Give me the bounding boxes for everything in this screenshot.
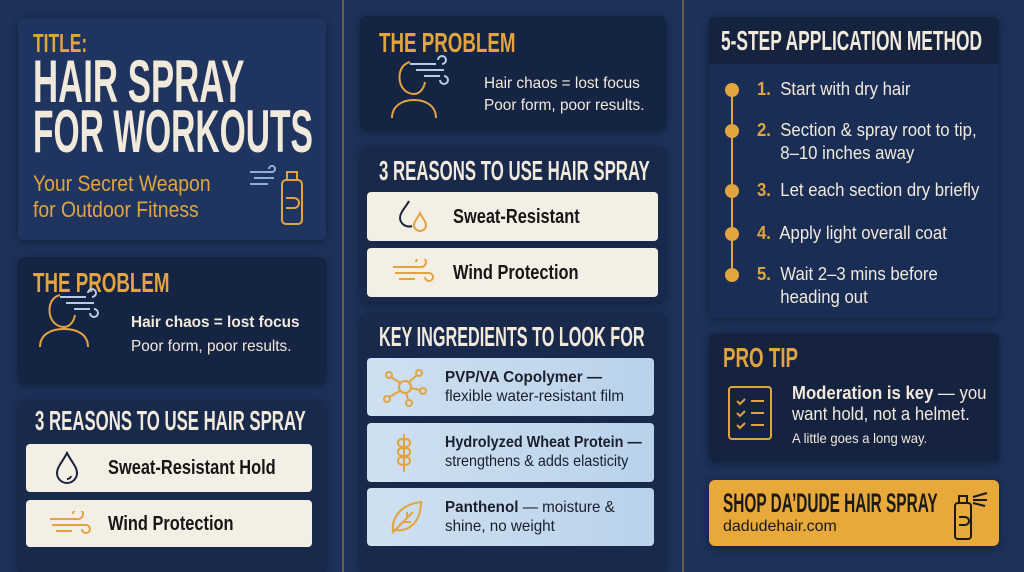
subtitle: Your Secret Weapon [33,171,211,196]
steps text: 1. Start with dry hair [757,79,911,99]
heading: PRO TIP [723,342,798,373]
icon: person with wind [391,55,449,118]
icon: drops [399,200,427,232]
card: PVP/VA [367,358,654,416]
icon: spray can [954,492,988,540]
card: wheat protein: Hydrolyzed Wheat Protein — [445,434,642,451]
steps text: 8–10 inches away [780,143,914,163]
panel: key ingredients [360,313,666,572]
card: wheat protein: strengthens & adds elasticity [445,453,628,470]
card: wind protection: Wind Protection [453,262,579,284]
card: sweat-resistant hold: Sweat-Resistant Hold [108,457,276,479]
panel: the problem (middle) [360,16,666,130]
tip text: Moderation is key — you [792,383,986,403]
panel: 5-step method [709,17,999,318]
icon: checklist [728,386,772,440]
timeline [725,83,739,282]
title: HAIR SPRAY [33,48,244,115]
call to action button: SHOP DA’DUDE HAIR SPRAY [723,488,938,518]
title [33,48,313,165]
icon: molecule [383,369,427,407]
call to action button [709,480,999,546]
card: wind protection [26,500,312,547]
icon: drop [56,451,78,484]
heading: KEY INGREDIENTS TO LOOK FOR [379,321,645,352]
call to action button: dadudehair.com [723,518,837,535]
subtitle [33,171,211,222]
card: sweat-resistant hold [26,444,312,492]
title: FOR WORKOUTS [33,98,313,165]
card: panthenol: Panthenol — moisture & [445,499,615,516]
panel: pro tip [709,333,999,462]
panel: 3 reasons (left) [18,400,326,572]
card: PVP/VA: flexible water-resistant film [445,388,624,405]
card: PVP/VA: PVP/VA Copolymer — [445,369,602,386]
panel: title [18,18,326,240]
problem text [131,314,300,355]
steps text: 3. Let each section dry briefly [757,180,979,200]
problem text: Poor form, poor results. [484,97,644,114]
icon: wind [393,259,434,282]
heading: 3 REASONS TO USE HAIR SPRAY [379,155,650,186]
card: wheat protein [367,423,654,482]
icon: wheat [397,434,411,472]
heading band: 5-STEP APPLICATION METHOD [721,25,982,56]
tip text [792,383,986,446]
card: sweat-resistant: Sweat-Resistant [453,206,580,228]
card: panthenol: shine, no weight [445,518,555,535]
icon: person with wind [39,288,99,347]
steps text: 4. Apply light overall coat [757,223,947,243]
steps text: 2. Section & spray root to tip, [757,120,977,140]
icon: wind [50,511,91,534]
card: wind protection [367,248,658,297]
heading: THE PROBLEM [33,267,170,298]
panel: 3 reasons (middle) [360,146,666,302]
label: title prefix: TITLE: [33,28,87,58]
problem text: Poor form, poor results. [131,338,291,355]
card: wind protection: Wind Protection [108,513,234,535]
icon: spray can with wind [250,165,303,225]
steps text [757,79,980,307]
tip text: A little goes a long way. [792,430,927,446]
problem text [484,75,644,114]
panel: the problem (left) [18,257,326,384]
card: panthenol [367,488,654,546]
heading: THE PROBLEM [379,27,516,58]
steps text: 5. Wait 2–3 mins before [757,264,938,284]
tip text: want hold, not a helmet. [792,404,970,424]
heading band [709,17,999,64]
card: sweat-resistant [367,192,658,241]
problem text: Hair chaos = lost focus [131,314,300,331]
subtitle: for Outdoor Fitness [33,197,199,222]
problem text: Hair chaos = lost focus [484,75,640,92]
icon: leaf [392,500,422,534]
heading: 3 REASONS TO USE HAIR SPRAY [35,405,306,436]
steps text: heading out [780,287,868,307]
